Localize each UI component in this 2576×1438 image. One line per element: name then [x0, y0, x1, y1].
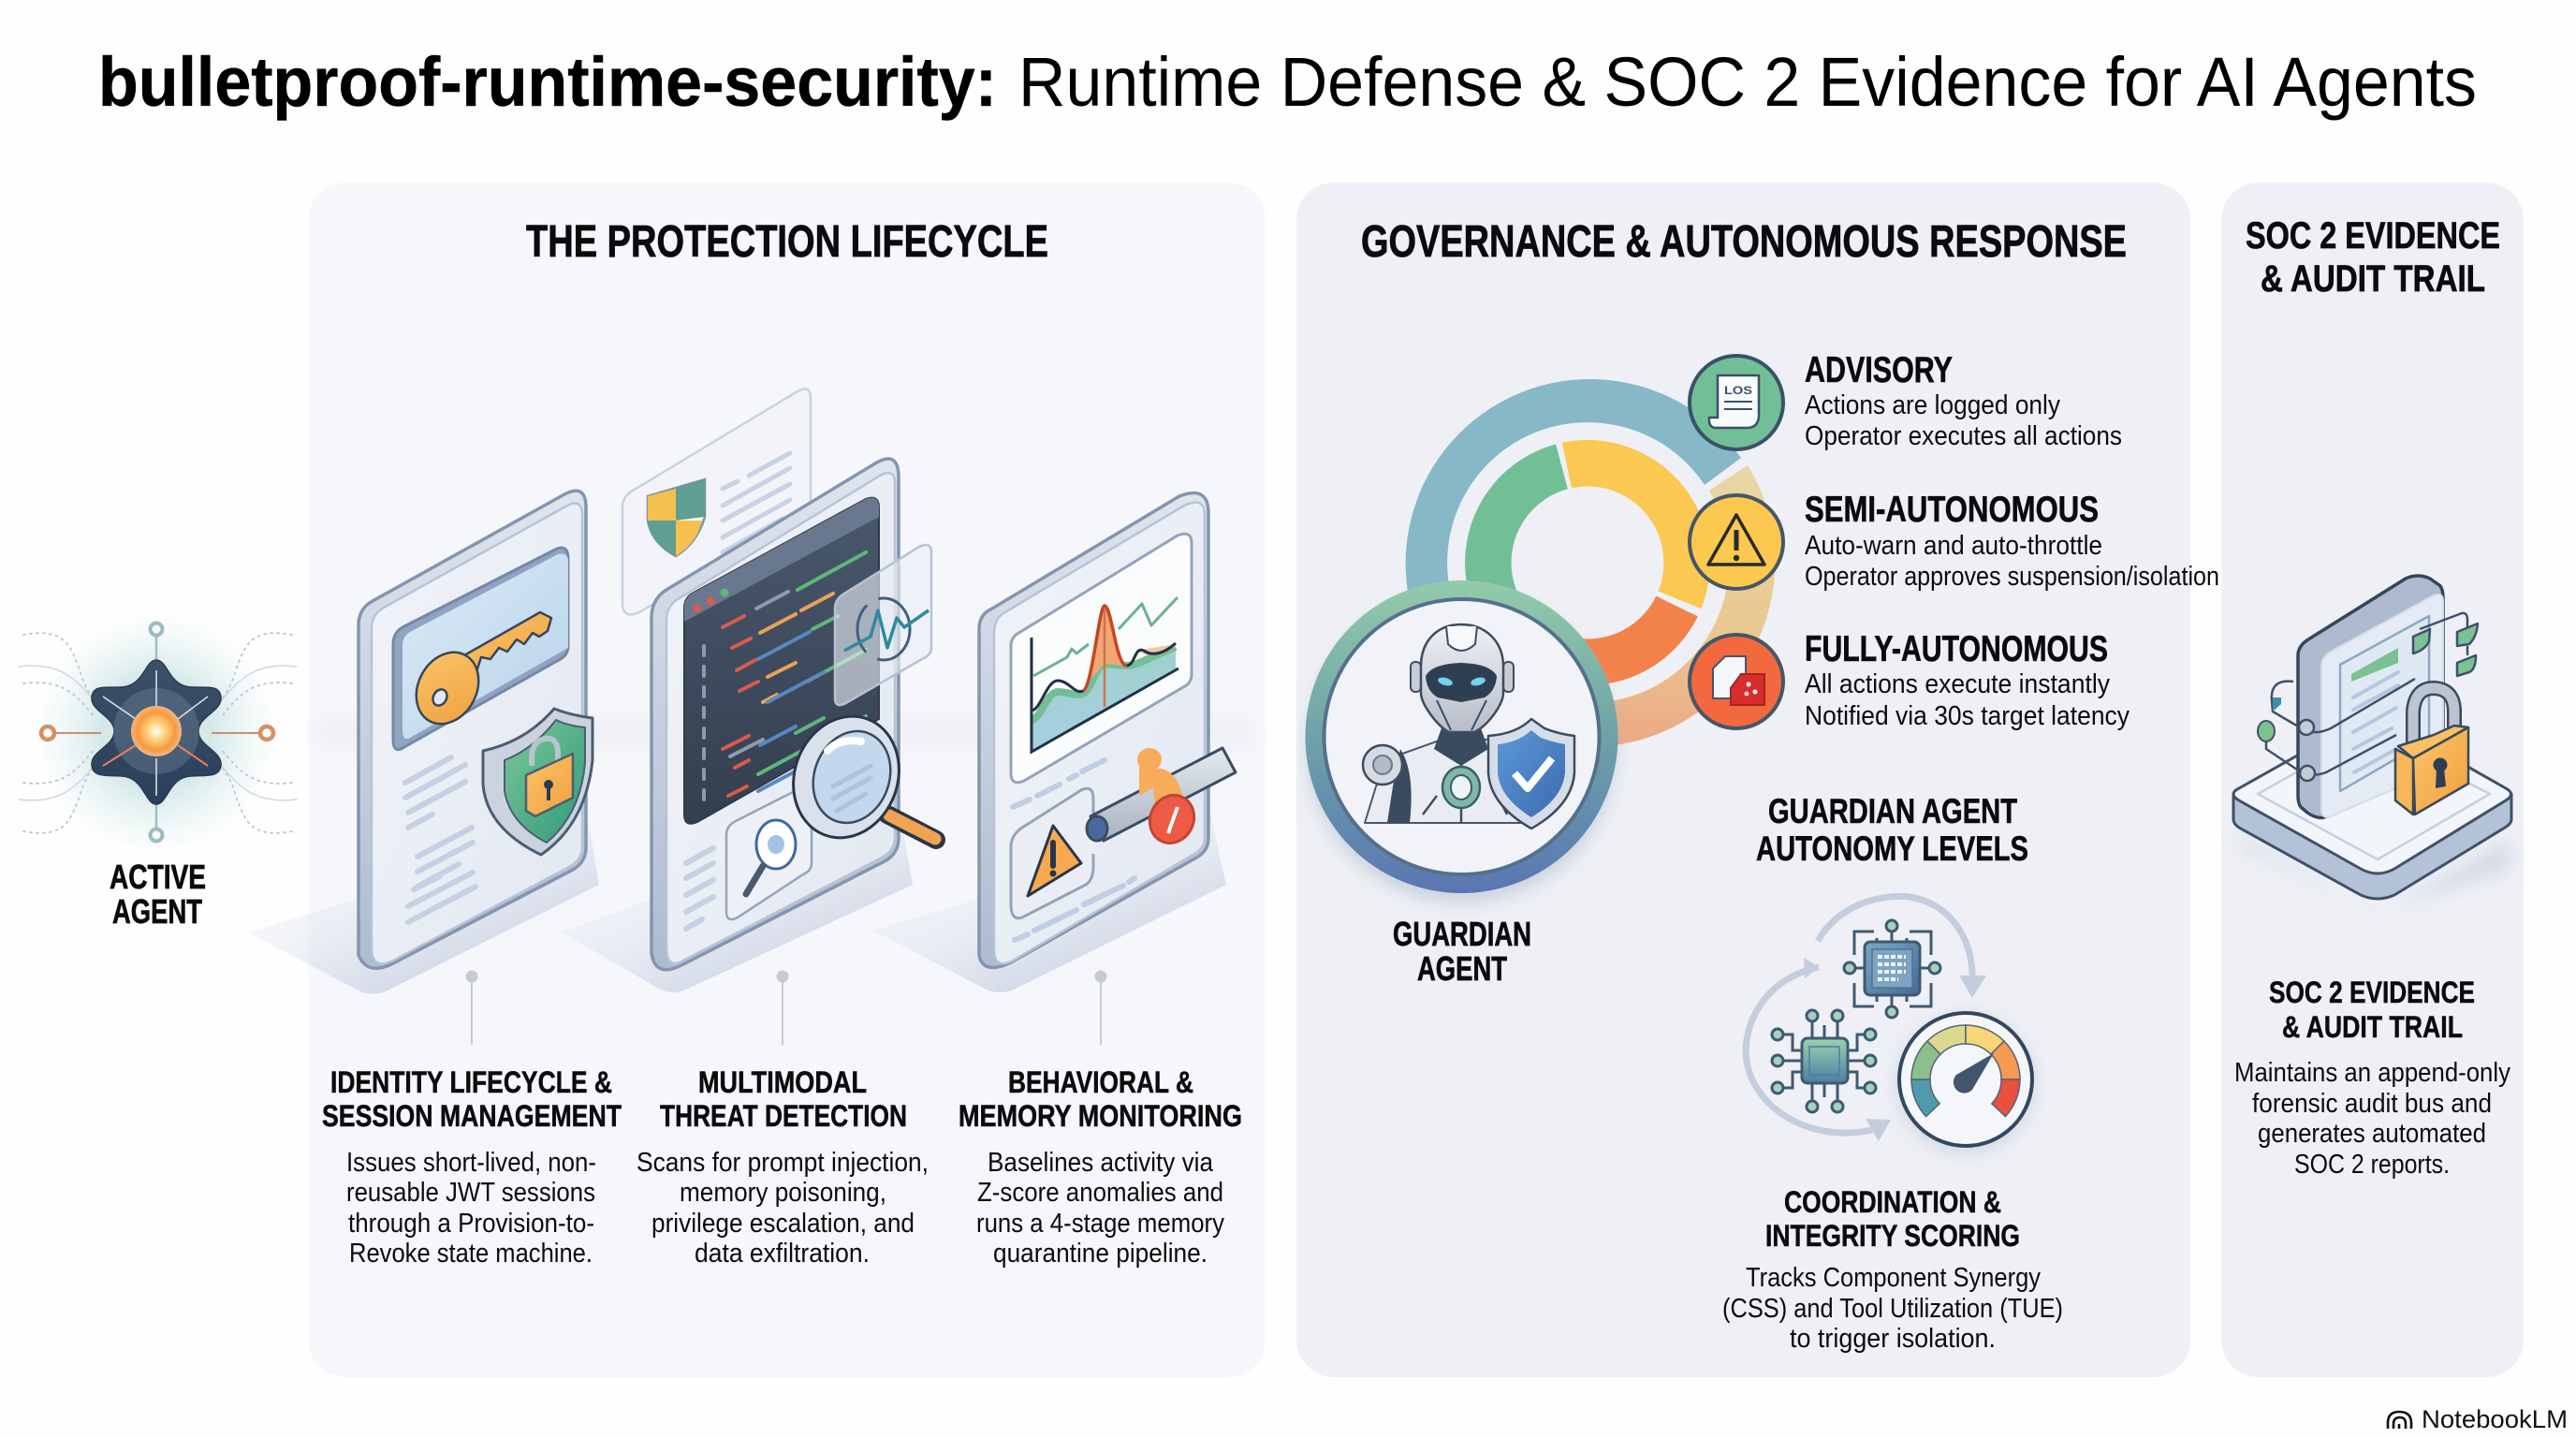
icon: agent hub [19, 611, 297, 855]
text block: identity lifecycle: Revoke state machine. [349, 1239, 593, 1269]
text block: coordination scoring [1722, 1185, 2063, 1354]
text block: coordination scoring: to trigger isolation. [1790, 1324, 1996, 1354]
label: active agent [110, 858, 206, 931]
text block: coordination scoring: (CSS) and Tool Utilization (TUE) [1722, 1294, 2063, 1324]
heading: soc 2 evidence [2246, 215, 2500, 300]
floating document [622, 389, 811, 614]
text block: soc 2 evidence: SOC 2 reports. [2294, 1150, 2450, 1180]
key tile [393, 548, 568, 750]
icon: green shield with lock [483, 709, 593, 855]
icon: coordination diagram [1746, 897, 2035, 1153]
text: semi-autonomous: Operator approves suspension/isolation [1805, 562, 2219, 592]
text: fully-autonomous: Notified via 30s target latency [1805, 701, 2130, 731]
icon: pipe and valve [1087, 748, 1236, 850]
text block: threat detection: privilege escalation, and [651, 1209, 915, 1239]
text block: soc 2 evidence: generates automated [2258, 1119, 2486, 1149]
text block: identity lifecycle: SESSION MANAGEMENT [322, 1099, 622, 1133]
icon: guardian robot [1305, 580, 1617, 903]
text: advisory: Operator executes all actions [1805, 421, 2122, 451]
chart: autonomy rings [1406, 379, 1775, 745]
panel: the protection lifecycle [248, 183, 1266, 1377]
text block: behavioral monitoring: BEHAVIORAL & [1008, 1065, 1193, 1099]
text block: soc 2 evidence: Maintains an append-only [2234, 1058, 2510, 1088]
heading: guardian agent autonomy levels: AUTONOMY LEVELS [1756, 829, 2028, 868]
icon: fully-autonomous [1690, 635, 1783, 728]
heading: guardian agent autonomy levels [1756, 792, 2028, 868]
text block: behavioral monitoring [959, 1065, 1242, 1269]
illustration: behavioral card [873, 493, 1236, 992]
text block: identity lifecycle: reusable JWT sessions [346, 1178, 595, 1208]
text block: behavioral monitoring: Baselines activity via [988, 1148, 1214, 1178]
label: active agent: AGENT [112, 892, 202, 931]
arrows [1746, 897, 1972, 1133]
top chip [1844, 920, 1940, 1018]
text block: threat detection [637, 1065, 929, 1269]
text: fully-autonomous: FULLY-AUTONOMOUS [1805, 629, 2108, 669]
text block: soc 2 evidence: forensic audit bus and [2252, 1089, 2492, 1119]
active agent [19, 611, 297, 931]
text block: coordination scoring: Tracks Component Synergy [1746, 1263, 2041, 1293]
label: guardian agent: AGENT [1417, 949, 1507, 988]
text block: threat detection: THREAT DETECTION [660, 1099, 907, 1133]
icon: advisory log: LOS [1724, 384, 1752, 397]
text block: threat detection: memory poisoning, [680, 1178, 886, 1208]
warning tile [1011, 788, 1093, 918]
text lines [405, 757, 476, 922]
left chip [1772, 1010, 1876, 1112]
illustration: identity card [248, 491, 599, 994]
label: guardian agent: GUARDIAN [1393, 915, 1531, 953]
text block: behavioral monitoring: MEMORY MONITORING [959, 1099, 1242, 1133]
text block: behavioral monitoring: runs a 4-stage memory [976, 1209, 1224, 1239]
title: bulletproof-runtime-security: [98, 43, 997, 121]
heading: the protection lifecycle: THE PROTECTION LIFECYCLE [526, 217, 1048, 267]
label: active agent: ACTIVE [110, 858, 206, 896]
icon: magnifier [777, 701, 936, 853]
text block: soc 2 evidence: SOC 2 EVIDENCE [2269, 976, 2475, 1009]
panel: governance and autonomous response [1296, 183, 2219, 1377]
panel: soc 2 evidence [2221, 183, 2524, 1377]
small scan tile [726, 787, 812, 919]
text block: soc 2 evidence [2234, 976, 2510, 1180]
heading: soc 2 evidence: & AUDIT TRAIL [2261, 258, 2485, 300]
text block: coordination scoring: COORDINATION & [1784, 1185, 2001, 1219]
text block: identity lifecycle [322, 1065, 622, 1269]
logo: NotebookLM: NotebookLM [2422, 1405, 2568, 1433]
heading: guardian agent autonomy levels: GUARDIAN AGENT [1768, 792, 2017, 830]
text: fully-autonomous [1805, 629, 2130, 731]
text: advisory: ADVISORY [1805, 350, 1953, 390]
text: advisory: Actions are logged only [1805, 390, 2060, 420]
text block: threat detection: data exfiltration. [695, 1239, 870, 1269]
icon: key [404, 612, 551, 735]
icon: audit device on base [2233, 576, 2511, 913]
illustration: threat detection card [562, 389, 936, 992]
text: fully-autonomous: All actions execute instantly [1805, 669, 2110, 699]
glass pulse panel [835, 545, 931, 705]
title: Runtime Defense & SOC 2 Evidence for AI Agents [1018, 43, 2477, 121]
text: advisory [1805, 350, 2122, 451]
text block: threat detection: MULTIMODAL [698, 1065, 867, 1099]
text block: coordination scoring: INTEGRITY SCORING [1765, 1219, 2020, 1253]
code screen [684, 498, 879, 824]
chart panel [1011, 534, 1192, 783]
connector pins [466, 971, 1106, 1045]
text block: behavioral monitoring: Z-score anomalies and [977, 1178, 1223, 1208]
text block: identity lifecycle: IDENTITY LIFECYCLE & [330, 1065, 612, 1099]
heading: soc 2 evidence: SOC 2 EVIDENCE [2246, 215, 2500, 257]
text block: identity lifecycle: Issues short-lived, non- [346, 1148, 596, 1178]
text block: behavioral monitoring: quarantine pipeline. [993, 1239, 1208, 1269]
icon: advisory log [1690, 356, 1783, 449]
text block: identity lifecycle: through a Provision-to- [348, 1209, 594, 1239]
text: semi-autonomous: Auto-warn and auto-throttle [1805, 531, 2102, 561]
label: guardian agent [1393, 915, 1531, 988]
text block: threat detection: Scans for prompt injection, [637, 1148, 929, 1178]
text: semi-autonomous: SEMI-AUTONOMOUS [1805, 490, 2099, 530]
heading: governance: GOVERNANCE & AUTONOMOUS RESPONSE [1361, 217, 2127, 267]
padlock [2395, 688, 2468, 814]
gauge [1896, 1013, 2035, 1153]
text block: soc 2 evidence: & AUDIT TRAIL [2282, 1010, 2463, 1044]
icon: semi-autonomous warning [1690, 495, 1783, 589]
text: semi-autonomous [1805, 490, 2219, 592]
title [98, 43, 2477, 121]
